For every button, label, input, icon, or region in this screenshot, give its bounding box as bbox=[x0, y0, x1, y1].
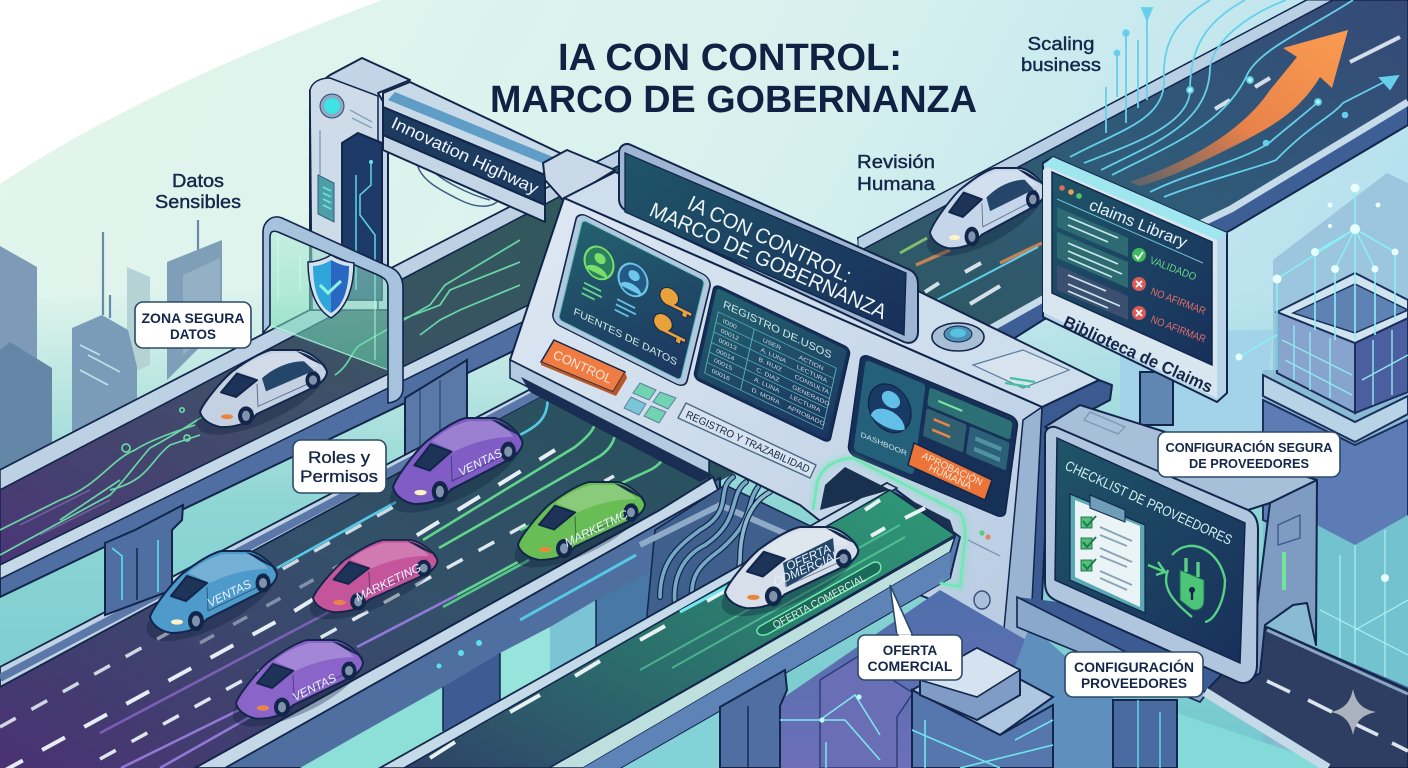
car: ventas blue bbox=[136, 545, 288, 657]
icon: plug arrow bbox=[1148, 562, 1165, 575]
callout: oferta comercial: COMERCIAL bbox=[868, 659, 952, 674]
title: IA CON CONTROL: bbox=[558, 37, 902, 79]
status no afirmar bbox=[1132, 277, 1208, 318]
panel: registro de usos: D. MORA bbox=[751, 387, 781, 407]
car: silver review car bbox=[917, 162, 1056, 272]
machine top panel bbox=[973, 350, 1069, 388]
icon: clipboard bbox=[1070, 494, 1145, 613]
panel: registro de usos: B. RUIZ bbox=[758, 356, 782, 374]
car: marketing green bbox=[504, 476, 656, 583]
lower road structure bbox=[380, 467, 960, 768]
bottom buildings bbox=[780, 648, 1053, 768]
lower pillar bbox=[720, 670, 787, 768]
lower teal haze bbox=[0, 290, 1408, 768]
status no afirmar: NO AFIRMAR bbox=[1149, 286, 1208, 318]
under machine structure bbox=[640, 485, 850, 690]
button: control bbox=[541, 340, 627, 396]
window dots bbox=[1059, 185, 1082, 199]
sign: ia con control: IA CON CONTROL: bbox=[684, 192, 855, 288]
right tower network bbox=[1120, 173, 1408, 768]
panel: registro de usos: 00013 bbox=[718, 337, 738, 352]
claim rows bbox=[1057, 207, 1128, 320]
road label: oferta comercial: OFERTA COMERCIAL bbox=[771, 572, 868, 632]
panel: dashboard bbox=[848, 353, 1018, 519]
panel: registro de usos: 00012 bbox=[720, 328, 740, 343]
panel: registro de usos: USER bbox=[762, 337, 782, 352]
car: ventas purple top: VENTAS bbox=[456, 446, 504, 479]
upper right road bbox=[858, 0, 1408, 360]
status no afirmar 2 bbox=[1132, 306, 1208, 346]
label: datos sensibles: Sensibles bbox=[155, 192, 241, 212]
banner: innovation highway: Innovation Highway bbox=[388, 113, 542, 198]
panel: fuentes de datos bbox=[551, 212, 712, 389]
car: oferta comercial bbox=[710, 521, 870, 632]
billboard post bbox=[1140, 372, 1173, 425]
callout: zona segura: DATOS bbox=[170, 327, 216, 342]
car: ventas purple bottom: VENTAS bbox=[290, 671, 338, 704]
panel: registro de usos: LECTURA bbox=[796, 364, 828, 385]
panel: fuentes de datos: FUENTES DE DATOS bbox=[573, 306, 678, 368]
car: oferta comercial: OFERTA bbox=[784, 541, 833, 573]
gate column and banner bbox=[310, 58, 615, 310]
right lower road bbox=[1017, 597, 1408, 768]
glass security gate bbox=[263, 217, 403, 403]
button: aprobación humana: APROBACIÓN bbox=[920, 449, 985, 489]
car: marketing pink: MARKETING bbox=[353, 560, 423, 604]
lane dashes bbox=[0, 506, 395, 727]
icon: secure plug bbox=[1166, 546, 1225, 622]
status validado bbox=[1132, 248, 1198, 283]
colored streaks bbox=[100, 393, 667, 768]
pillars bbox=[405, 360, 467, 480]
icon: keys bbox=[651, 284, 695, 346]
car: ventas purple bottom bbox=[222, 634, 374, 742]
label: datos sensibles bbox=[155, 171, 241, 212]
panel: registro de usos: CONSULTA bbox=[794, 374, 830, 396]
machine status lights bbox=[968, 530, 1000, 609]
car: marketing green: MARKETMC bbox=[562, 507, 630, 550]
callout: oferta comercial bbox=[858, 585, 962, 680]
label: scaling business bbox=[1021, 34, 1101, 75]
button: aprobación humana: HUMANA bbox=[927, 463, 973, 492]
green arch bbox=[813, 458, 965, 587]
panel: registro de usos: REGISTRO DE.USOS bbox=[722, 299, 833, 361]
callout: configuración proveedores: PROVEEDORES bbox=[1081, 676, 1187, 691]
panel: registro de usos: APROBADO bbox=[787, 404, 825, 428]
knob bbox=[932, 323, 984, 351]
callout: configuración proveedores: CONFIGURACIÓN bbox=[1074, 660, 1194, 675]
callout: configuración segura: CONFIGURACIÓN SEGURA bbox=[1166, 440, 1332, 455]
network glowing nodes bbox=[1239, 188, 1395, 370]
panel: registro de usos: ID00 bbox=[722, 318, 738, 331]
title: MARCO DE GOBERNANZA bbox=[490, 79, 977, 121]
arch opening bbox=[820, 467, 955, 535]
panel: registro de usos: A. LUNA bbox=[760, 347, 787, 365]
panel: registro de usos: A. LUNA bbox=[753, 377, 781, 395]
button: aprobación humana bbox=[908, 443, 992, 500]
circuit traces bbox=[0, 240, 520, 555]
claims library title: claims Library bbox=[1087, 197, 1189, 252]
green road surface bbox=[404, 490, 955, 768]
status no afirmar 2: NO AFIRMAR bbox=[1149, 314, 1208, 346]
label: scaling business: Scaling bbox=[1028, 34, 1094, 54]
sign: ia con control bbox=[619, 144, 918, 343]
panel: claims billboard bbox=[1043, 157, 1227, 402]
panel: registro de usos: LECTURA bbox=[789, 394, 822, 415]
beam bbox=[383, 82, 560, 175]
panel: dashboard: DASHBOOR bbox=[860, 430, 908, 458]
road label: oferta comercial bbox=[757, 562, 881, 635]
checklist title: CHECKLIST DE PROVEEDORES bbox=[1063, 457, 1235, 548]
pill: registro y trazabilidad: REGISTRO Y TRAZABILIDAD bbox=[684, 409, 812, 476]
callout: zona segura: ZONA SEGURA bbox=[142, 311, 245, 326]
callout: configuración segura: DE PROVEEDORES bbox=[1189, 456, 1309, 471]
upper left road bbox=[0, 150, 620, 597]
machine: control hub bbox=[510, 144, 1112, 640]
small grid indicator bbox=[624, 383, 676, 423]
status validado: VALIDADO bbox=[1148, 255, 1198, 283]
callout: roles y permisos: Roles y bbox=[308, 448, 371, 467]
callout: configuración segura bbox=[1158, 432, 1340, 477]
title bbox=[490, 37, 977, 121]
white corner arc bbox=[0, 0, 382, 184]
panel: registro de usos: 00016 bbox=[711, 368, 731, 383]
panel: registro de usos: 00014 bbox=[715, 348, 735, 363]
panel: registro de usos bbox=[693, 284, 851, 443]
panel: registro de usos: C. DIAZ bbox=[755, 367, 780, 384]
callout: oferta comercial: OFERTA bbox=[883, 643, 937, 658]
left pillar under road bbox=[105, 505, 183, 615]
car: marketing pink bbox=[299, 535, 448, 633]
lower background bbox=[600, 590, 1340, 768]
cable loops bbox=[417, 163, 500, 206]
icon: watermark sparkle bbox=[1331, 689, 1376, 735]
panel: registro de usos: GENERADO bbox=[791, 384, 830, 408]
panel: checklist de proveedores bbox=[1045, 405, 1317, 683]
main road side and windows bbox=[195, 477, 720, 768]
label: revisión humana: Humana bbox=[857, 174, 936, 194]
car: silver data car bbox=[186, 344, 338, 450]
icon: growth arrow bbox=[1129, 30, 1348, 186]
callout: roles y permisos bbox=[293, 440, 386, 493]
callout: configuración proveedores bbox=[1065, 652, 1203, 697]
callout: roles y permisos: Permisos bbox=[300, 467, 378, 486]
callout: zona segura bbox=[135, 302, 251, 348]
panel: registro de usos: 00015 bbox=[713, 357, 733, 372]
label: scaling business: business bbox=[1021, 55, 1101, 75]
label: revisión humana bbox=[857, 152, 936, 194]
cables bbox=[660, 477, 770, 605]
avatars bbox=[581, 241, 651, 302]
car: ventas purple top bbox=[379, 412, 534, 529]
car: ventas blue: VENTAS bbox=[205, 577, 253, 610]
label: datos sensibles: Datos bbox=[172, 171, 224, 191]
biblioteca de claims caption: Biblioteca de Claims bbox=[1060, 312, 1216, 397]
skyline left bbox=[0, 220, 222, 490]
car: oferta comercial: COMERCIAL bbox=[771, 547, 842, 589]
label: revisión humana: Revisión bbox=[857, 152, 935, 172]
panel: registro de usos: ACTION bbox=[798, 354, 824, 372]
main road bbox=[0, 380, 740, 768]
sign: ia con control: MARCO DE GOBERNANZA bbox=[646, 199, 890, 324]
icon: shield bbox=[308, 255, 354, 318]
data flow lines bbox=[1070, 0, 1398, 197]
button: control: CONTROL bbox=[551, 347, 614, 386]
